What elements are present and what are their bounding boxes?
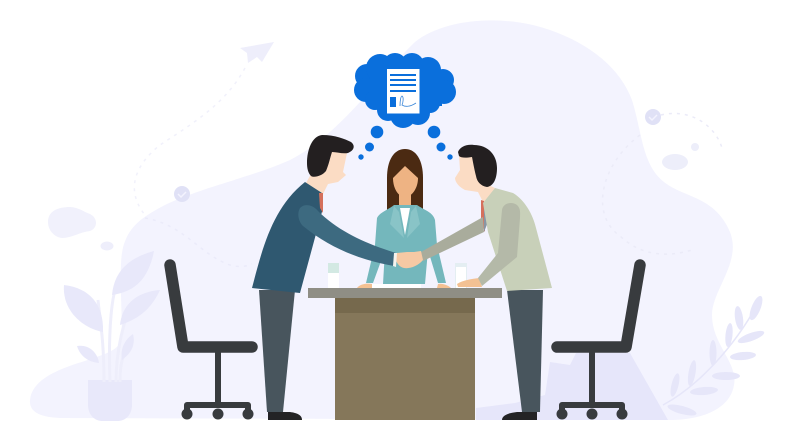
handshake xyxy=(393,251,423,268)
tie xyxy=(319,193,323,213)
neck and face xyxy=(455,155,495,204)
leaf left xyxy=(64,285,103,332)
hair xyxy=(307,135,354,177)
hair xyxy=(458,145,497,187)
cloud xyxy=(354,53,456,128)
glass left xyxy=(328,263,339,288)
dashed path right xyxy=(603,113,722,254)
leaf right xyxy=(120,290,160,325)
check badge right xyxy=(645,109,661,125)
cuff xyxy=(393,253,397,267)
hand on table xyxy=(457,278,482,287)
hair xyxy=(387,149,423,210)
chair right xyxy=(556,265,640,420)
dashed path left xyxy=(145,218,252,267)
ellipse right xyxy=(662,154,688,170)
shirt xyxy=(484,200,488,232)
signature xyxy=(400,96,416,106)
desk xyxy=(308,288,502,420)
neck and face xyxy=(306,150,347,196)
check badge left xyxy=(174,186,190,202)
leaf lower left xyxy=(77,346,99,363)
foliage right xyxy=(663,294,766,418)
man left xyxy=(252,135,396,420)
glass right xyxy=(455,263,467,288)
stems xyxy=(98,285,132,382)
cloud with contract xyxy=(354,53,456,128)
stamp xyxy=(390,97,396,107)
cloud shape left xyxy=(48,207,96,238)
sleeve xyxy=(478,203,520,286)
legs xyxy=(259,290,295,412)
paper plane xyxy=(134,42,274,215)
jacket xyxy=(483,188,552,291)
face xyxy=(393,166,418,197)
forearm xyxy=(421,217,484,261)
man right xyxy=(421,145,552,420)
pot xyxy=(88,380,132,421)
small dot right xyxy=(691,143,699,151)
legs xyxy=(507,290,543,412)
plant xyxy=(64,251,160,421)
shoe xyxy=(268,412,302,420)
leaf lower right xyxy=(121,334,134,360)
thought bubbles xyxy=(358,126,453,160)
text lines xyxy=(390,74,416,92)
jacket and arms xyxy=(366,205,446,284)
leaf top xyxy=(112,251,154,295)
shirt xyxy=(400,208,410,235)
shoe xyxy=(502,412,537,420)
tie xyxy=(481,200,485,232)
woman seated xyxy=(357,149,451,288)
small dot left xyxy=(100,242,114,250)
hands xyxy=(395,251,423,268)
neck xyxy=(399,190,411,210)
chair left xyxy=(170,265,254,420)
jacket xyxy=(252,182,323,293)
document xyxy=(387,69,420,114)
document on table xyxy=(372,284,421,288)
hands xyxy=(357,284,451,288)
arm xyxy=(298,205,396,266)
right hill xyxy=(476,353,668,420)
lapels xyxy=(390,206,420,238)
